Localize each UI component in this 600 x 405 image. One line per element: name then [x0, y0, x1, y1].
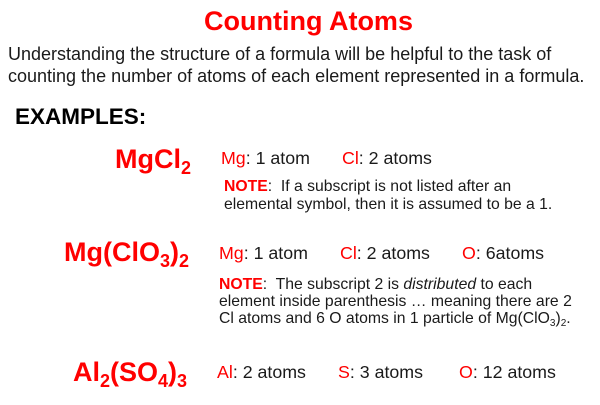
- note: MgCl2: elemental symbol, then it is assumed to be a 1.: [224, 196, 552, 212]
- note: Mg(ClO3)2: NOTE: The subscript 2 is distributed to each: [219, 276, 532, 293]
- note: Mg(ClO3)2: element inside parenthesis … meaning there are 2: [219, 293, 572, 310]
- intro text: [8, 44, 584, 86]
- atom counts: MgCl2: Cl: 2 atoms: [342, 148, 432, 168]
- intro text: Understanding the structure of a formula will be helpful to the task of: [8, 44, 551, 64]
- atom counts: Mg(ClO3)2: Mg: 1 atom: [219, 243, 308, 263]
- atom counts: Al2(SO4)3: Al: 2 atoms: [217, 362, 306, 382]
- atom counts: Al2(SO4)3: [217, 362, 556, 382]
- atom counts: Al2(SO4)3: S: 3 atoms: [338, 362, 423, 382]
- atom counts: MgCl2: [221, 148, 432, 168]
- atom counts: Mg(ClO3)2: O: 6atoms: [462, 243, 544, 263]
- atom counts: Mg(ClO3)2: Cl: 2 atoms: [340, 243, 430, 263]
- atom counts: Al2(SO4)3: O: 12 atoms: [459, 362, 556, 382]
- note: MgCl2: [224, 178, 552, 212]
- atom counts: MgCl2: Mg: 1 atom: [221, 148, 310, 168]
- formula: MgCl2: MgCl2: [115, 144, 191, 178]
- examples heading: EXAMPLES:: [15, 104, 146, 129]
- note: Mg(ClO3)2: Cl atoms and 6 O atoms in 1 particle of Mg(ClO3)2.: [219, 310, 571, 329]
- intro text: counting the number of atoms of each element represented in a formula.: [8, 66, 584, 86]
- note: Mg(ClO3)2: [219, 276, 572, 329]
- title: Counting Atoms: [204, 6, 413, 36]
- formula: Al2(SO4)3: Al2(SO4)3: [73, 357, 187, 391]
- formula: Mg(ClO3)2: Mg(ClO3)2: [64, 237, 189, 271]
- note: MgCl2: NOTE: If a subscript is not listed after an: [224, 178, 511, 195]
- atom counts: Mg(ClO3)2: [219, 243, 544, 263]
